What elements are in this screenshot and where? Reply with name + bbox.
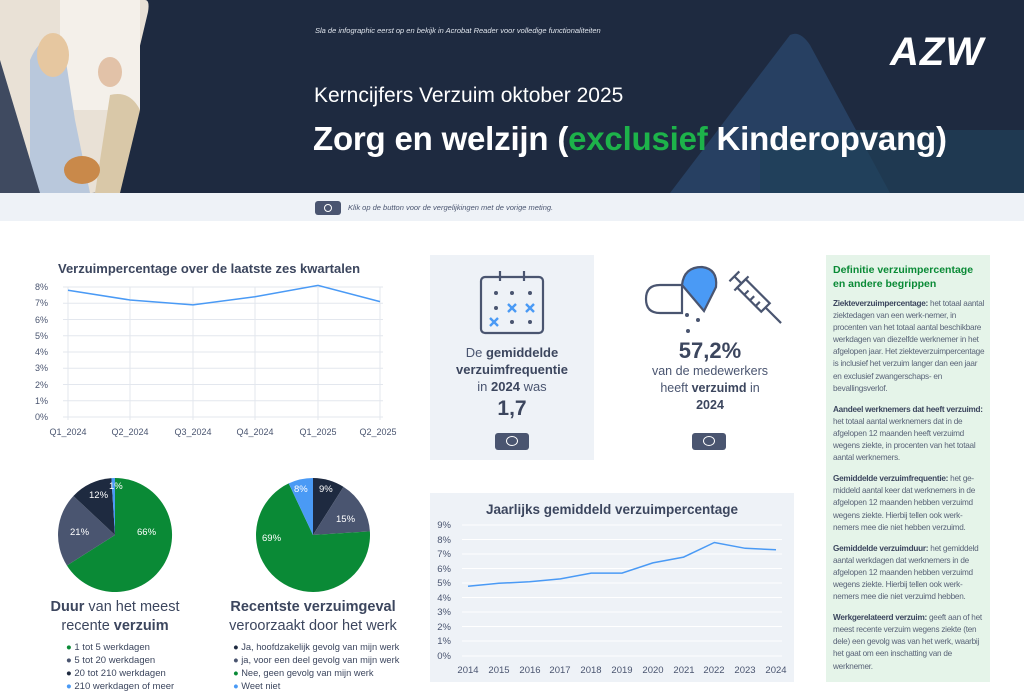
pie: duur: 12% xyxy=(89,490,109,501)
text: duur title + legend: Duur van het meest xyxy=(51,599,179,615)
text: frequentie: in 2024 was xyxy=(477,379,547,394)
chart: quarterly line xyxy=(35,261,397,438)
chart: quarterly line: 8% xyxy=(35,282,48,292)
chart: quarterly line: Verzuimpercentage over de laatste zes kwartalen xyxy=(58,261,360,276)
pie: duur: 1% xyxy=(109,481,123,492)
card: verzuimd xyxy=(644,266,782,450)
chart: quarterly line: 5% xyxy=(35,331,48,341)
info strip xyxy=(0,193,1024,221)
card: verzuimd: heeft verzuimd in xyxy=(660,381,760,395)
panel: definities: Definitie verzuimpercentage en andere begrippen xyxy=(833,264,973,290)
chart: yearly line: 2014 xyxy=(457,665,479,676)
text: duur title + legend: ● 5 tot 20 werkdagen xyxy=(66,655,155,666)
chart: quarterly line: Q2_2025 xyxy=(359,427,397,437)
logo AZW: AZW xyxy=(890,30,984,74)
chart: yearly line: 2018 xyxy=(580,665,602,676)
text: werk title + legend: veroorzaakt door het werk xyxy=(229,618,397,634)
text: werk title + legend: ● Nee, geen gevolg van mijn werk xyxy=(233,668,374,678)
panel: definities: Ziekteverzuimpercentage: het totaal aantal ziektedagen van een werk-nemer, in procenten van het totaal aantal beschikbare werkdagen van diezelfde werknemer in het afgelopen jaar. Het ziekteverzuimpercentage is inclusief het verzuim langer dan een jaar en exclusief zwangerschaps- en bevallingsverlof. xyxy=(833,299,984,393)
chart: yearly line: Jaarlijks gemiddeld verzuimpercentage xyxy=(486,502,738,517)
chart: quarterly line: 1% xyxy=(35,396,48,406)
chart: quarterly line: Q1_2025 xyxy=(299,427,337,437)
pie: duur xyxy=(58,478,172,592)
chart: yearly line: 8% xyxy=(437,535,452,546)
panel: definities xyxy=(826,255,990,682)
panel: definities: Aandeel werknemers dat heeft verzuimd: het totaal aantal werknemers dat in de afgelopen 12 maanden heeft verzuimd wegens ziekte, in procenten van het totaal aantal werknemers. xyxy=(833,405,983,462)
chart: quarterly line: 0% xyxy=(35,412,48,422)
text: duur title + legend: ● 20 tot 210 werkdagen xyxy=(66,668,166,679)
card: verzuimfrequentie xyxy=(430,255,594,460)
pie: werk: 8% xyxy=(294,484,308,495)
pie charts xyxy=(58,478,370,592)
panel: definities: Werkgerelateerd verzuim: geeft aan of het meest recente verzuim wegens ziekte (ten dele) een gevolg was van het werk, waarbij het gaat om een inschatting van de werknemer. xyxy=(833,613,982,671)
chart: yearly line: 2020 xyxy=(642,665,664,676)
small italic note: Sla de infographic eerst op en bekijk in Acrobat Reader voor volledige functionaliteiten xyxy=(315,26,601,35)
subtitle: Kerncijfers Verzuim oktober 2025 xyxy=(314,84,623,107)
text: frequentie: verzuimfrequentie xyxy=(456,362,568,377)
pie: werk: 15% xyxy=(336,514,356,525)
chart: yearly line: 9% xyxy=(437,520,452,531)
chart: yearly line: 2022 xyxy=(703,665,725,676)
text: duur title + legend: recente verzuim xyxy=(61,618,169,634)
chart: yearly line: 2023 xyxy=(734,665,756,676)
card: verzuimd: van de medewerkers xyxy=(652,364,768,378)
decorative triangle xyxy=(670,34,1024,193)
chart: yearly line: 1% xyxy=(437,636,452,647)
panel: definities: Gemiddelde verzuimduur: het gemiddeld aantal werkdagen dat werknemers in de afgelopen 12 maanden hebben verzuimd wegens ziekte. Hierbij tellen ook werk-nemers mee die niet verzuimd hebben. xyxy=(833,544,978,601)
chart: yearly line: 2% xyxy=(437,622,452,633)
panel: definities: Gemiddelde verzuimfrequentie: het ge-middeld aantal keer dat werknemers in de afgelopen 12 maanden hebben verzuimd wegens ziekte. Hierbij tellen ook werk-nemers mee die niet hebben verzuimd. xyxy=(833,474,975,532)
chart: quarterly line: 3% xyxy=(35,363,48,373)
chart: yearly line xyxy=(430,493,794,682)
chart: yearly line: 7% xyxy=(437,549,452,560)
icon: calendar xyxy=(480,271,544,334)
chart: yearly line: 2017 xyxy=(549,665,571,676)
pie: werk: 9% xyxy=(319,484,333,495)
chart: quarterly line: 2% xyxy=(35,380,48,390)
text: frequentie: De gemiddelde xyxy=(466,345,558,360)
chart: yearly line: 2024 xyxy=(765,665,787,676)
chart: quarterly line: Q1_2024 xyxy=(49,427,87,437)
chart: yearly line: 3% xyxy=(437,607,452,618)
icon: pill and syringe xyxy=(644,266,782,333)
chart: quarterly line: 7% xyxy=(35,298,48,308)
chart: yearly line: 2016 xyxy=(519,665,541,676)
chart: yearly line: 0% xyxy=(437,651,452,662)
text: duur title + legend: ● 210 werkdagen of meer xyxy=(66,681,174,692)
card: verzuimd: 2024 xyxy=(696,398,724,412)
text: werk title + legend: Recentste verzuimgeval xyxy=(230,599,396,615)
eye button xyxy=(495,433,529,450)
text: werk title + legend xyxy=(229,599,400,691)
chart: yearly line: 2019 xyxy=(611,665,633,676)
text: frequentie xyxy=(456,345,568,394)
value 57,2%: 57,2% xyxy=(679,338,741,363)
info strip: Klik op de button voor de vergelijkingen met de vorige meting. xyxy=(348,203,553,212)
text: werk title + legend: ● Ja, hoofdzakelijk gevolg van mijn werk xyxy=(233,642,399,652)
main title: Zorg en welzijn (exclusief Kinderopvang) xyxy=(313,120,947,157)
text: duur title + legend: ● 1 tot 5 werkdagen xyxy=(66,642,150,653)
chart: quarterly line: Q2_2024 xyxy=(111,427,149,437)
pie: duur: 21% xyxy=(70,527,90,538)
chart: quarterly line: Q3_2024 xyxy=(174,427,212,437)
text: werk title + legend: ● ja, voor een deel gevolg van mijn werk xyxy=(233,655,399,665)
header banner xyxy=(0,0,1024,193)
chart: yearly line: 4% xyxy=(437,593,452,604)
pie: werk xyxy=(256,478,370,592)
chart: yearly line: 5% xyxy=(437,578,452,589)
pie: werk: 69% xyxy=(262,533,282,544)
value 1,7: 1,7 xyxy=(497,397,527,420)
pie: duur: 66% xyxy=(137,527,157,538)
chart: quarterly line: 4% xyxy=(35,347,48,357)
chart: yearly line: 2021 xyxy=(673,665,695,676)
chart: quarterly line: Q4_2024 xyxy=(236,427,274,437)
text: duur title + legend xyxy=(51,599,180,692)
eye button xyxy=(692,433,726,450)
photo xyxy=(0,0,149,193)
text: werk title + legend: ● Weet niet xyxy=(233,681,280,691)
chart: yearly line: 6% xyxy=(437,564,452,575)
chart: quarterly line: 6% xyxy=(35,315,48,325)
eye button small xyxy=(315,201,341,215)
chart: yearly line: 2015 xyxy=(488,665,510,676)
